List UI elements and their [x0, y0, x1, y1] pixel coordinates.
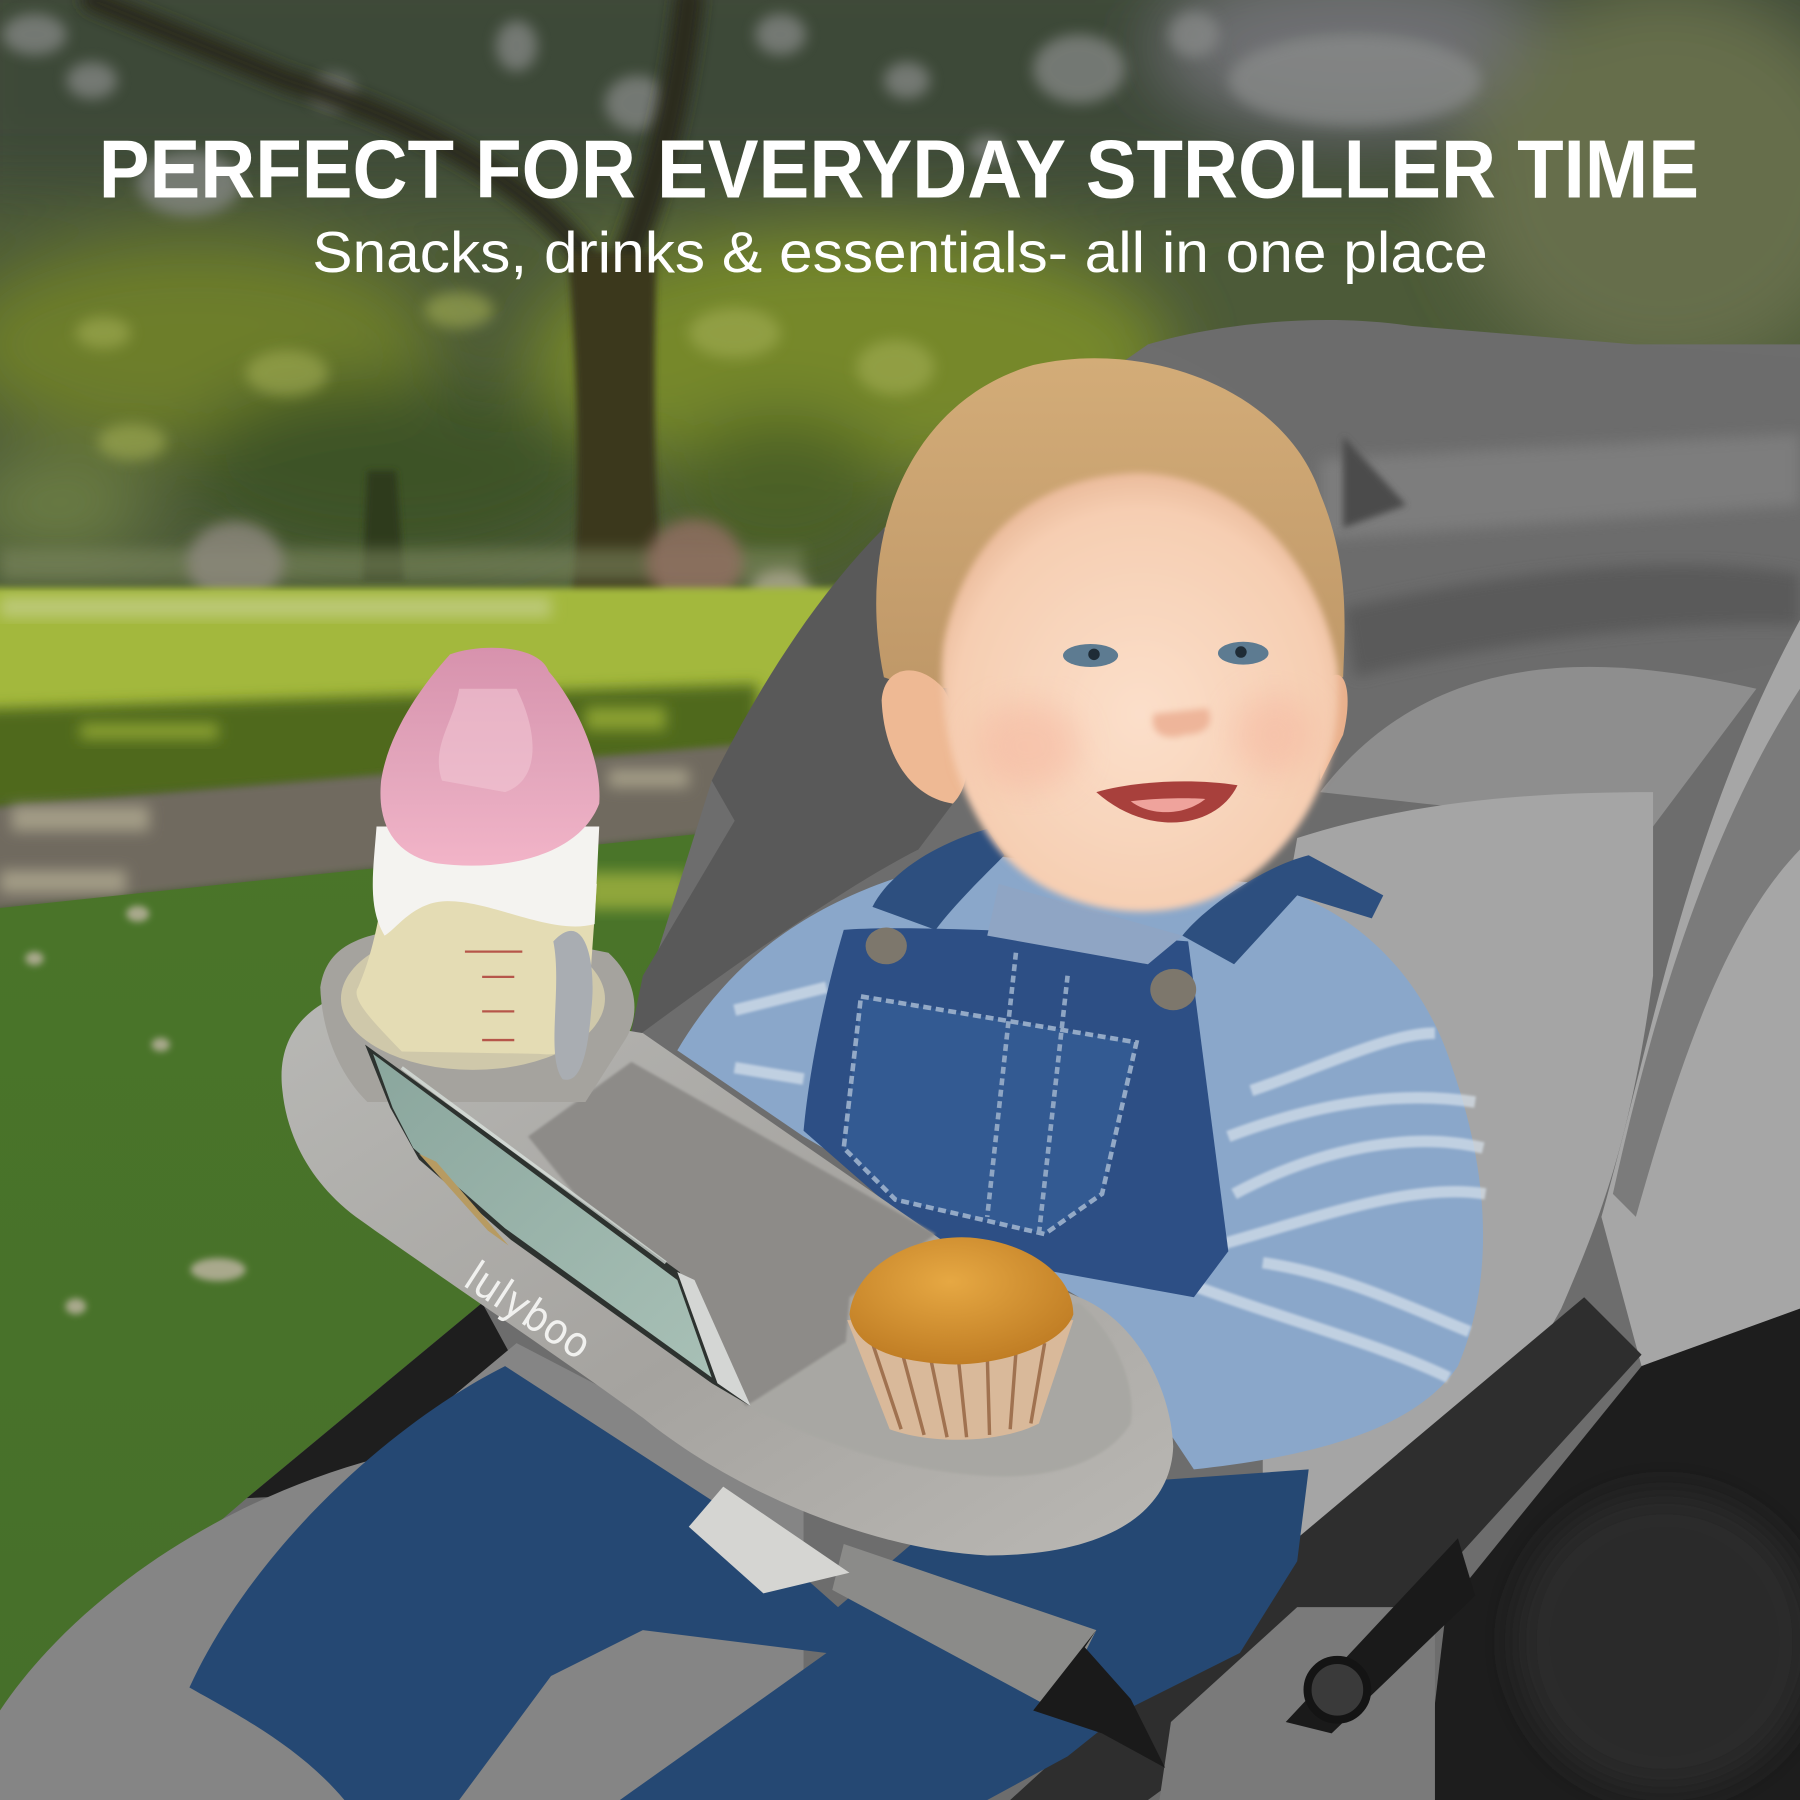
left frame	[247, 1303, 517, 1498]
overalls bib	[804, 928, 1228, 1297]
lower grass	[0, 829, 746, 1800]
tray	[282, 927, 1173, 1555]
tree trunk	[556, 253, 683, 693]
mouth	[1096, 781, 1238, 822]
sweater torso and left sleeve	[677, 855, 1483, 1469]
muffin	[847, 1237, 1073, 1440]
subtitle: Snacks, drinks & essentials- all in one place	[312, 221, 1488, 285]
phone	[365, 1045, 751, 1406]
jeans	[189, 1366, 1309, 1800]
distant treeline and people	[0, 519, 810, 612]
canopy top	[1148, 320, 1800, 849]
hair	[876, 358, 1345, 689]
canopy side	[629, 528, 953, 1042]
baby	[189, 358, 1485, 1800]
title: PERFECT FOR EVERYDAY STROLLER TIME	[99, 122, 1699, 215]
right frame	[1601, 620, 1800, 1366]
seat back	[1263, 792, 1653, 1561]
eyes	[1063, 644, 1118, 667]
baby ear	[882, 670, 967, 804]
tray crossbar	[689, 1487, 1165, 1768]
face	[942, 473, 1338, 911]
tree branches	[92, 0, 689, 298]
tray brand: lulyboo	[455, 1253, 600, 1370]
seat base	[0, 1343, 804, 1800]
lawn	[0, 588, 849, 735]
footpath	[0, 744, 746, 909]
bib pocket	[844, 996, 1136, 1234]
bottle	[357, 648, 600, 1080]
